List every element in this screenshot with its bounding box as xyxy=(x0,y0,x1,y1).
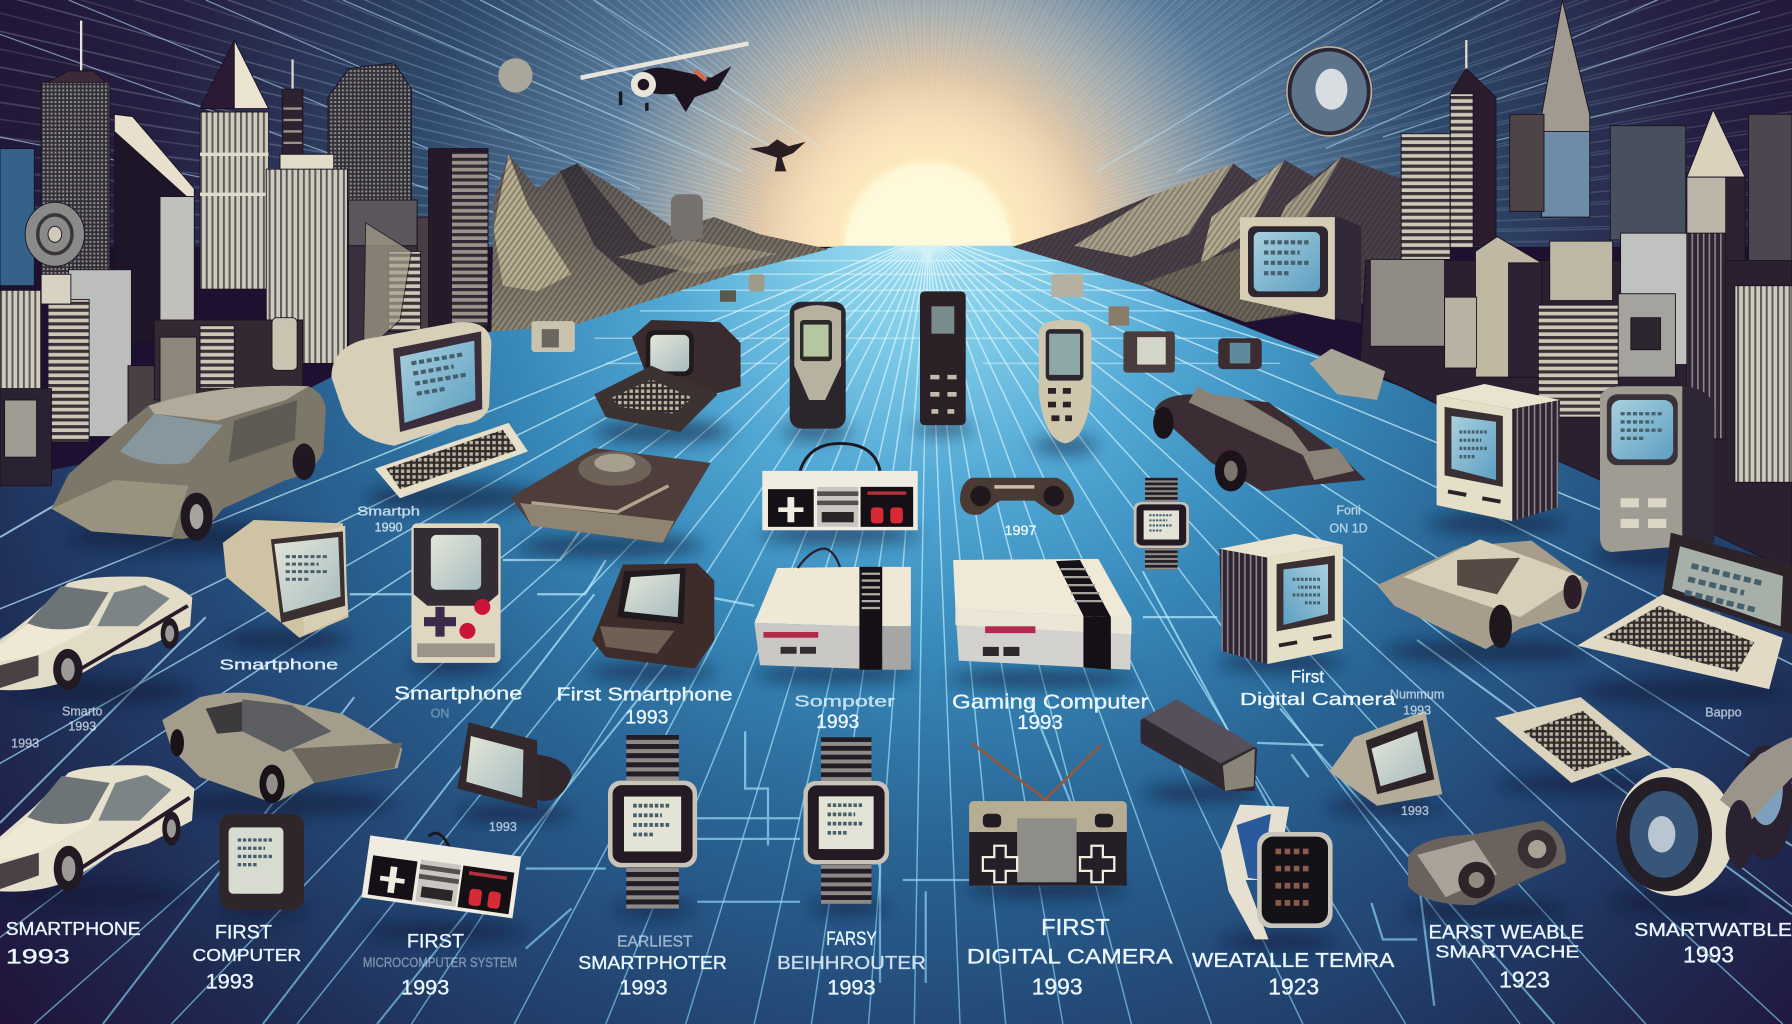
cream gable building xyxy=(1475,237,1542,377)
right city skyline xyxy=(1360,0,1792,571)
caption: First Computer 1993 xyxy=(193,921,301,994)
caption: Smartphone 1993: 1993 xyxy=(6,943,70,968)
device: NES console small xyxy=(754,549,911,670)
device: van xyxy=(51,386,326,541)
device: sedan row three xyxy=(0,577,192,690)
caption: First 1993 center left: FIRST xyxy=(407,930,464,952)
white striped tower xyxy=(1401,134,1450,259)
caption: Earliest Smartphone 1993 xyxy=(578,933,727,999)
device: handheld game console xyxy=(411,523,501,663)
caption: Gaming Computer 1993: Gaming Computer xyxy=(952,691,1149,714)
device: portable computer xyxy=(592,563,714,669)
device: candybar phone xyxy=(790,302,846,429)
device: mini tablet xyxy=(219,814,304,910)
caption: Earliest Wearable Smartwatch 1923: SMARTVACHE xyxy=(1435,942,1579,962)
caption: First 1993 center left xyxy=(363,930,517,999)
captions xyxy=(6,503,1792,999)
spire tower xyxy=(1542,0,1590,217)
ground grid lines xyxy=(0,234,1792,1024)
device: radio with antennae xyxy=(969,743,1127,886)
device: dark console xyxy=(511,448,711,543)
caption: Smartwatch 1993: SMARTWATBLE xyxy=(1634,919,1792,940)
ground plane xyxy=(0,246,1792,1024)
caption: Smartphone small: Smartphone xyxy=(219,658,338,674)
device: cream handset xyxy=(1039,320,1091,443)
caption: Earliest Smartphone 1993: EARLIEST xyxy=(617,933,693,950)
distant small devices xyxy=(531,274,1385,400)
caption: Earliest Wearable Smartwatch 1923: EARST WEABLE xyxy=(1429,921,1584,943)
dark tower xyxy=(328,63,411,206)
dark striped building xyxy=(349,149,488,360)
dark city mass xyxy=(1360,261,1792,571)
caption: First Digital Camera 1993: DIGITAL CAMERA xyxy=(967,943,1173,968)
object shadows xyxy=(0,421,1783,951)
device: trapezoid monitor xyxy=(1329,711,1442,806)
caption: Foni: Foni xyxy=(1336,503,1361,517)
caption: Farsy Computer 1993: 1993 xyxy=(827,974,876,999)
ribbed tower far right xyxy=(1735,286,1792,482)
round disc xyxy=(25,202,85,266)
caption: First Computer 1993: COMPUTER xyxy=(193,945,301,965)
caption: small smartphone row two xyxy=(357,504,420,534)
device: big camera lens xyxy=(1616,768,1735,896)
caption: First Digital Camera: First xyxy=(1291,666,1324,686)
caption: Smartphone 1993 xyxy=(6,918,141,968)
device: laptop xyxy=(1577,533,1792,689)
caption: Farsy Computer 1993: BEIHHROUTER xyxy=(777,952,926,973)
sun xyxy=(757,74,1099,246)
caption: Smartwatch 1993 xyxy=(1634,919,1792,967)
caption: First Digital Camera xyxy=(1240,666,1396,709)
device: remote phone xyxy=(920,291,966,425)
caption: small labels: 1993 xyxy=(11,736,39,750)
caption: First Digital Camera: Digital Camera xyxy=(1240,689,1396,709)
device: game controller flat xyxy=(362,833,521,918)
caption: Gaming Computer 1993 xyxy=(952,691,1149,734)
caption: Earliest Smartphone 1993: 1993 xyxy=(619,974,668,999)
caption: small labels: 1993 xyxy=(68,719,96,733)
caption: Foni: ON 1D xyxy=(1329,522,1368,536)
caption: First Smartphone 1993: 1993 xyxy=(625,706,668,728)
caption: Foni xyxy=(1329,503,1368,536)
caption: small labels: Smarto xyxy=(62,704,103,718)
tall cream tower xyxy=(1450,40,1496,248)
cone tower xyxy=(1687,110,1745,274)
caption: First Digital Camera 1993: 1993 xyxy=(1032,973,1083,999)
caption: small smartphone row two: Smartph xyxy=(357,504,420,518)
caption: First Digital Camera 1993 xyxy=(967,914,1173,999)
device: roadster car xyxy=(1153,386,1366,491)
machine stacks xyxy=(1370,241,1675,417)
device: console car xyxy=(1377,539,1589,649)
device: game controller with cable xyxy=(762,443,918,530)
caption: Earliest Wearable Smartwatch 1923 xyxy=(1429,921,1584,992)
caption: Smartphone xyxy=(394,682,522,721)
machine blocks xyxy=(128,223,421,469)
device: beige computer right xyxy=(1437,384,1560,521)
caption: small labels: Nummum xyxy=(1390,687,1444,701)
device: smartwatch xyxy=(1221,805,1333,939)
device: beige desktop monitor xyxy=(331,322,491,446)
lens orb xyxy=(1286,46,1373,137)
caption: Smartphone 1993: SMARTPHONE xyxy=(6,918,141,939)
device: desktop keyboard xyxy=(375,423,528,498)
device: lens cluster right xyxy=(1720,737,1792,869)
caption: small labels: 1993 xyxy=(489,820,517,834)
caption: First 1993 center left: 1993 xyxy=(401,974,449,999)
caption: Wearable Camera 1923: WEATALLE TEMRA xyxy=(1192,949,1395,972)
caption: Wearable Camera 1923: 1923 xyxy=(1268,973,1319,999)
dark rough towers xyxy=(1510,114,1792,297)
device: flat keyboard xyxy=(1495,697,1651,783)
caption: First Digital Camera 1993: FIRST xyxy=(1041,914,1110,940)
caption: small smartphone row two: 1990 xyxy=(375,520,403,534)
moon xyxy=(498,58,533,93)
small plane xyxy=(750,139,806,171)
device: handheld terminal xyxy=(1600,386,1714,552)
device: black box xyxy=(1141,699,1257,791)
caption: Wearable Camera 1923 xyxy=(1192,949,1395,999)
caption: small labels: Bappo xyxy=(1705,706,1742,720)
caption: First 1993 center left: MICROCOMPUTER SYSTEM xyxy=(363,955,517,970)
device: small gamepad xyxy=(960,478,1074,515)
device: beige CRT xyxy=(223,520,349,638)
sky background xyxy=(0,0,1792,247)
caption: Smartwatch 1993: 1993 xyxy=(1683,941,1734,967)
tower with spire xyxy=(41,21,110,277)
left low blocks xyxy=(0,149,131,486)
caption: Gaming Computer 1993: 1993 xyxy=(1017,711,1063,734)
device: sedan bottom xyxy=(0,765,194,892)
device: terminal computer xyxy=(594,320,741,432)
caption: Earliest Wearable Smartwatch 1923: 1923 xyxy=(1499,966,1550,992)
device: small wristwatch xyxy=(1134,478,1189,570)
caption: First Smartphone 1993: First Smartphone xyxy=(557,684,733,705)
caption: Farsy Computer 1993 xyxy=(777,928,926,999)
caption: Computer 1993: Sompoter xyxy=(794,693,896,710)
pale ribbed building xyxy=(266,154,347,363)
grey building xyxy=(1621,233,1726,439)
caption: Computer 1993 xyxy=(794,693,896,733)
caption: First Computer 1993: FIRST xyxy=(215,921,272,943)
caption: Farsy Computer 1993: FARSY xyxy=(826,928,877,950)
biplane xyxy=(581,43,749,112)
sky light rays xyxy=(0,0,1792,246)
caption: Smartphone: ON xyxy=(431,707,449,721)
device: beige computer mirrored xyxy=(1219,534,1343,664)
left mountains xyxy=(491,154,829,331)
caption: small labels: 1993 xyxy=(1403,703,1431,717)
left city skyline xyxy=(0,21,488,486)
label: 1997: 1997 xyxy=(1005,523,1037,538)
caption: Computer 1993: 1993 xyxy=(816,711,859,733)
caption: small labels xyxy=(11,687,1742,834)
caption: First Computer 1993: 1993 xyxy=(206,969,254,994)
device: wristwatch two xyxy=(803,737,889,904)
device: wristwatch one xyxy=(608,735,697,909)
wedge tower xyxy=(114,114,194,343)
device: NES console large xyxy=(953,559,1131,670)
device: small monitor with strap xyxy=(457,722,571,809)
caption: Earliest Smartphone 1993: SMARTPHOTER xyxy=(578,952,727,973)
antenna tower xyxy=(282,59,303,160)
pointed tower xyxy=(200,40,269,289)
device: camcorder xyxy=(1408,821,1566,905)
big television xyxy=(1240,217,1361,323)
right mountains xyxy=(1013,157,1406,322)
device: coupe xyxy=(162,693,402,803)
caption: Smartphone: Smartphone xyxy=(394,682,522,703)
caption: small labels: 1993 xyxy=(1401,804,1429,818)
caption: First Smartphone 1993 xyxy=(557,684,733,728)
